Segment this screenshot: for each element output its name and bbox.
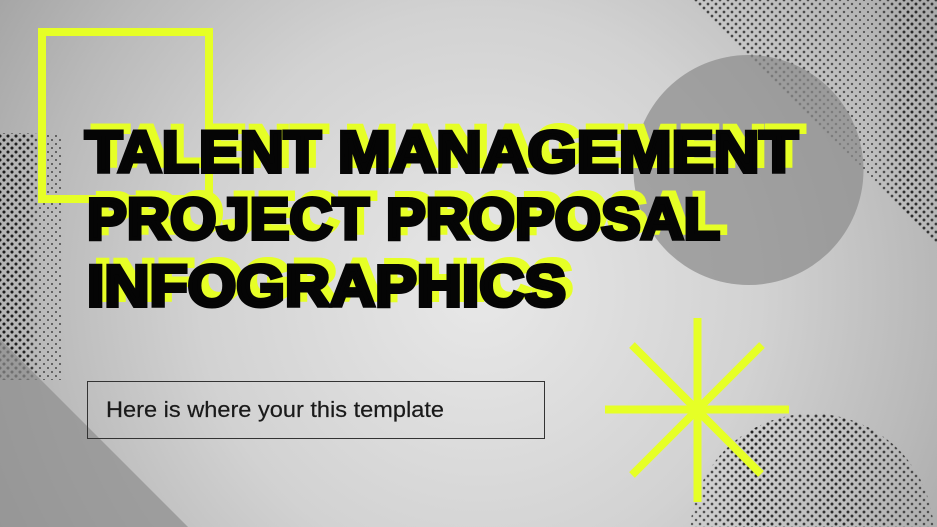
title shadow: lime offset text: TALENT	[92, 114, 328, 179]
title text: black foreground	[85, 120, 798, 319]
title shadow: lime offset text: MANAGEMENT	[345, 114, 805, 179]
grey circle: top right	[634, 55, 864, 285]
lime outlined square	[42, 32, 209, 199]
halftone triangle: top right	[690, 0, 937, 245]
subtitle box	[88, 382, 544, 438]
title text: black foreground: PROJECT	[87, 187, 369, 252]
halftone panel: left strip	[0, 133, 61, 380]
title shadow: lime offset text	[92, 114, 805, 313]
icon: lime eight-point star	[605, 318, 789, 502]
title text: black foreground: PROPOSAL	[386, 187, 720, 252]
title text: black foreground: TALENT	[85, 120, 321, 185]
title shadow: lime offset text: PROPOSAL	[393, 181, 727, 246]
subtitle text: Here is where your this template	[106, 397, 444, 422]
grey triangle: bottom left	[0, 339, 188, 527]
halftone semicircle: bottom right	[690, 414, 934, 527]
title text: black foreground: INFOGRAPHICS	[87, 254, 566, 319]
title shadow: lime offset text: PROJECT	[94, 181, 376, 246]
title shadow: lime offset text: INFOGRAPHICS	[94, 248, 573, 313]
title text: black foreground: MANAGEMENT	[338, 120, 798, 185]
title	[85, 114, 805, 319]
